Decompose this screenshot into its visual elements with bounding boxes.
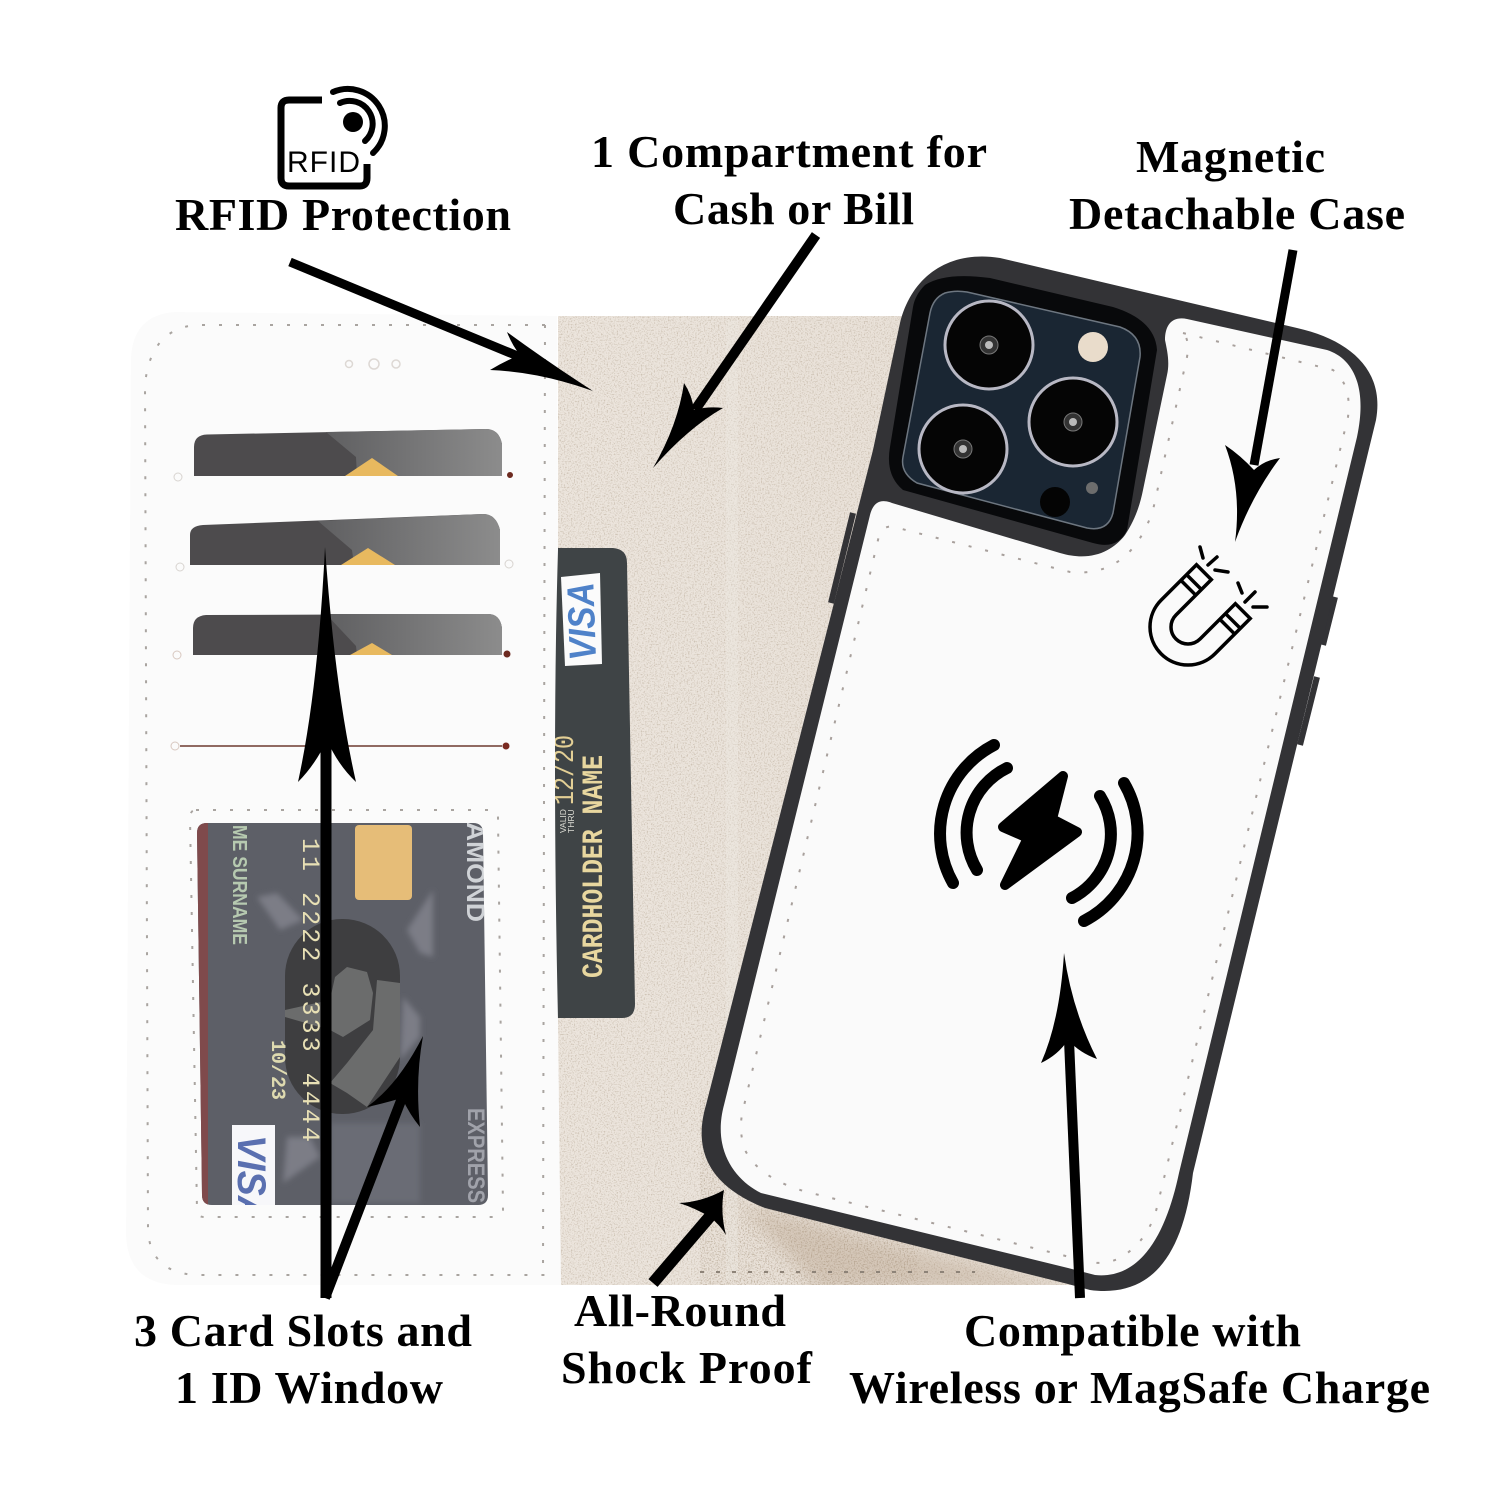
arrow: RFID (290, 262, 593, 391)
lens 2 (1029, 378, 1117, 466)
RFID label: RFID (287, 146, 360, 179)
stitching (741, 333, 1349, 1263)
heading: wireless charge (849, 1305, 1430, 1413)
heading: RFID Protection: RFID Protection (175, 189, 511, 240)
snap dots (346, 359, 400, 369)
heading: shock proof: All-Round (574, 1285, 786, 1336)
heading: wireless charge: Wireless or MagSafe Charge (849, 1362, 1430, 1413)
card name: ME SURNAME (228, 825, 250, 945)
oval cut-out with globe (285, 919, 400, 1114)
expiry date: 12/20 (549, 735, 582, 805)
arrow: ID window (325, 1036, 423, 1298)
heading: magnetic case: Detachable Case (1069, 188, 1405, 239)
icon: RFID (281, 89, 385, 186)
visa logo box: VISA (560, 582, 605, 661)
heading: wireless charge: Compatible with (964, 1305, 1301, 1356)
chip (355, 825, 412, 900)
lens 3 (919, 405, 1007, 493)
heading: cash compartment: Cash or Bill (673, 183, 914, 234)
diamond label: AMOND (461, 822, 489, 922)
lens 1 (945, 301, 1033, 389)
phone case (702, 257, 1377, 1291)
expiry: 10/23 (265, 1040, 288, 1100)
heading: card slots: 1 ID Window (175, 1362, 443, 1413)
heading: shock proof (561, 1285, 813, 1393)
camera glass (903, 291, 1140, 529)
cardholder name: CARDHOLDER NAME (578, 755, 612, 978)
white leather back (721, 318, 1361, 1275)
heading: magnetic case: Magnetic (1136, 131, 1325, 182)
arrow: cash compartment (653, 235, 816, 468)
flash (1078, 332, 1108, 362)
card slot 2 (176, 514, 513, 571)
valid thru: VALID (558, 809, 568, 833)
arrow: shock proof (653, 1190, 726, 1283)
camera bump glossy surround (889, 276, 1157, 545)
case frame (702, 257, 1377, 1291)
icon: magnet (1134, 547, 1267, 681)
visa card in slot (545, 548, 635, 1018)
signal waves (343, 112, 363, 132)
panel: suede cash compartment (558, 316, 1095, 1290)
empty slot line (171, 742, 510, 750)
valid thru (558, 809, 576, 833)
panel: white wallet card side (126, 312, 561, 1285)
icon: wireless charging (940, 745, 1138, 921)
arrow: magnetic (1225, 250, 1293, 542)
express label: EXPRESS (462, 1108, 489, 1203)
arrow: card slots (298, 547, 356, 1298)
heading: shock proof: Shock Proof (561, 1342, 813, 1393)
heading: cash compartment (591, 126, 987, 234)
card slot 3 (173, 614, 510, 659)
heading: card slots: 3 Card Slots and (134, 1305, 472, 1356)
card slot 1 (174, 429, 513, 481)
heading: cash compartment: 1 Compartment for (591, 126, 987, 177)
arrow: wireless charging (1041, 953, 1097, 1298)
lidar sensor (1040, 487, 1070, 517)
valid thru: THRU (566, 809, 576, 833)
visa logo (232, 1125, 275, 1205)
side buttons (831, 513, 1335, 745)
heading: magnetic case (1069, 131, 1405, 239)
visa logo: VISA (229, 1135, 273, 1223)
heading: card slots (134, 1305, 472, 1413)
ID window with card (190, 810, 503, 1223)
microphone (1086, 482, 1098, 494)
card number: 11 2222 3333 4444 (295, 838, 324, 1142)
